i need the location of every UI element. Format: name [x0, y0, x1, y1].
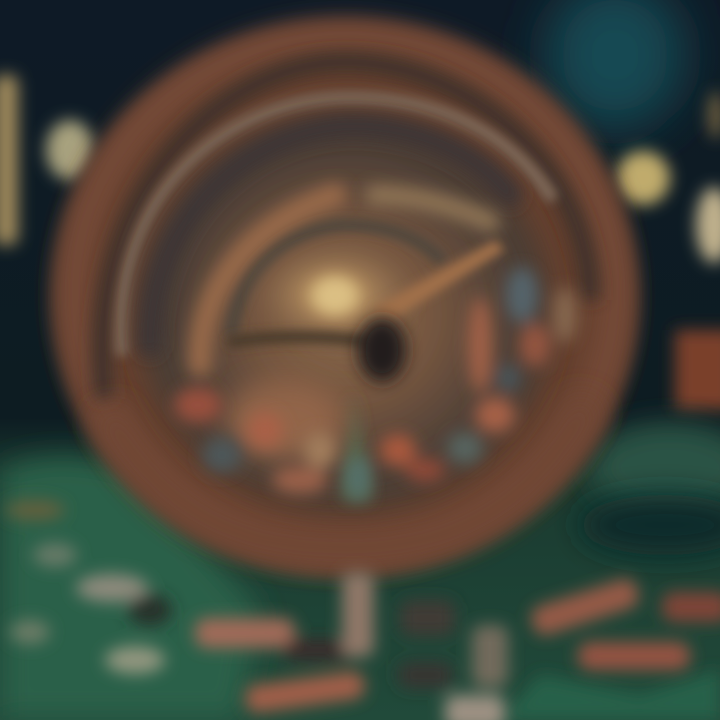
round light left [46, 120, 94, 180]
light ring [121, 98, 550, 350]
right chips [528, 576, 642, 638]
coloured pockets [174, 267, 577, 500]
centre chips [195, 618, 295, 648]
wheel pointer [370, 240, 505, 318]
dark groove [102, 62, 590, 400]
background lights [0, 0, 720, 410]
green table right [590, 423, 720, 513]
teal glow top right [545, 0, 685, 130]
horizontal dark spoke [228, 337, 370, 342]
green table bottom [500, 670, 720, 720]
chips and cards on table [5, 500, 720, 720]
outer rim [51, 20, 639, 576]
lower rim [105, 400, 590, 548]
upper pocket arc [375, 195, 490, 222]
dark hub shadow [358, 318, 406, 382]
wheel [51, 20, 639, 576]
left table chips [5, 500, 65, 520]
central cone [245, 235, 425, 355]
far right light [696, 187, 720, 263]
orange block right [675, 330, 720, 410]
left vertical light [0, 75, 18, 245]
far right upper light [708, 91, 720, 139]
round light right [616, 151, 670, 205]
outer rim highlight [75, 35, 615, 551]
dark bowl right [580, 495, 720, 555]
inner face [140, 120, 550, 510]
lower spoke [342, 395, 372, 500]
green table left [0, 458, 260, 720]
pocket ring left orange arc [200, 195, 335, 365]
lower face warm [225, 380, 345, 460]
dark inner groove [150, 126, 510, 345]
inner dark arc [232, 225, 440, 330]
cone centre highlight [313, 278, 357, 314]
